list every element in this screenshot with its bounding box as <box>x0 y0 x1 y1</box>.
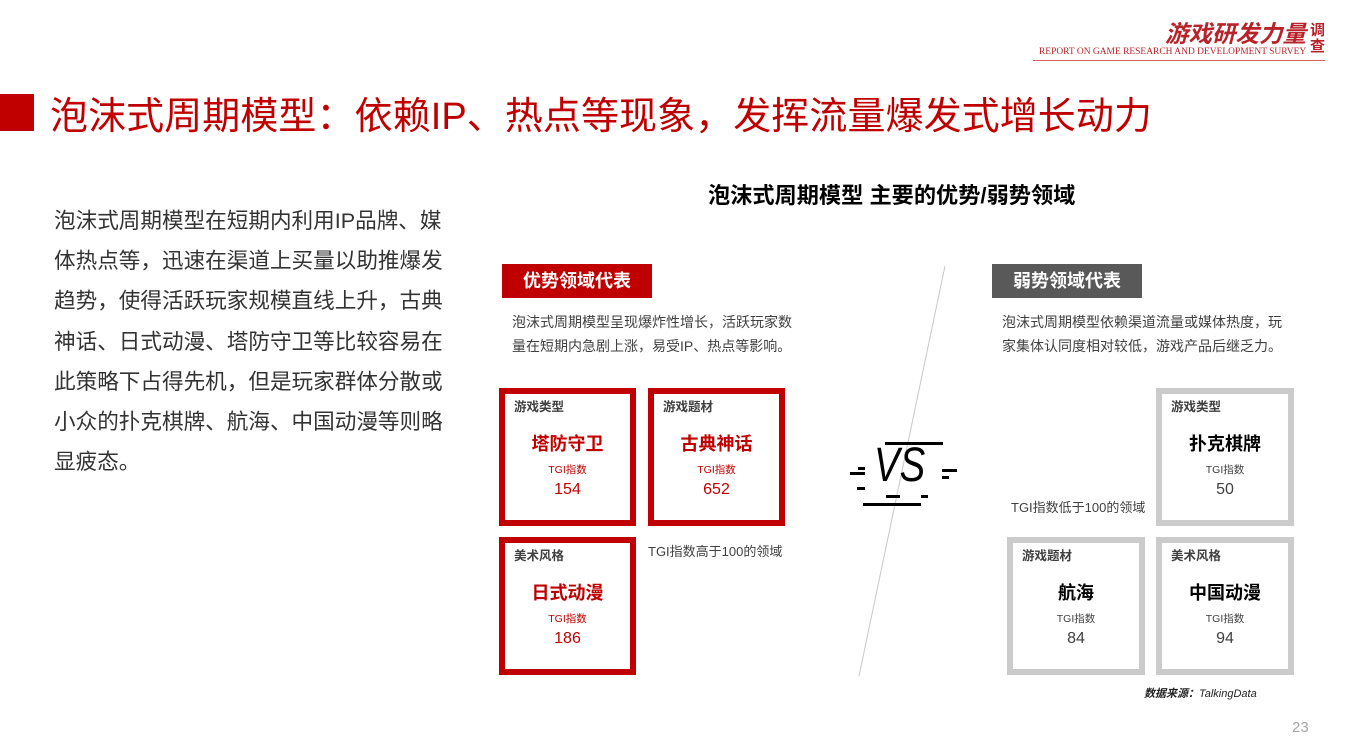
weakness description <box>1002 314 1282 354</box>
body text: 趋势，使得活跃玩家规模直线上升，古典 <box>54 288 443 313</box>
card: navigation: 84 <box>1067 630 1085 647</box>
VS text: VS <box>874 439 925 492</box>
logo title: 游戏研发力量 <box>1165 21 1306 47</box>
logo side text: 调查 <box>1310 22 1325 55</box>
weakness description: 泡沫式周期模型依赖渠道流量或媒体热度，玩 <box>1002 314 1282 330</box>
card: classical mythology: TGI指数 <box>697 464 736 476</box>
card: tower defense <box>499 388 636 526</box>
divider line <box>858 266 946 676</box>
body text <box>54 208 443 474</box>
card: japanese anime <box>499 537 636 675</box>
card: classical mythology <box>648 388 785 526</box>
body text: 显疲态。 <box>54 449 140 474</box>
VS graphic <box>850 439 957 506</box>
body text: 小众的扑克棋牌、航海、中国动漫等则略 <box>54 409 443 434</box>
advantage description: 泡沫式周期模型呈现爆炸性增长，活跃玩家数 <box>512 314 792 330</box>
weakness tag <box>992 264 1142 298</box>
card: chinese anime: TGI指数 <box>1206 613 1244 625</box>
title marker <box>0 94 34 131</box>
card: japanese anime: 日式动漫 <box>532 583 604 603</box>
weakness description: 家集体认同度相对较低，游戏产品后继乏力。 <box>1002 338 1282 354</box>
card: poker: 50 <box>1216 481 1234 498</box>
card: japanese anime: 186 <box>554 630 581 647</box>
card: japanese anime: 美术风格 <box>514 549 564 563</box>
card: tower defense: 塔防守卫 <box>532 434 604 454</box>
card: poker: 扑克棋牌 <box>1189 434 1261 454</box>
card: classical mythology: 652 <box>703 481 730 498</box>
advantage tag <box>502 264 652 298</box>
card: navigation: 游戏题材 <box>1022 549 1072 563</box>
logo subtitle: REPORT ON GAME RESEARCH AND DEVELOPMENT SURVEY <box>1039 47 1306 57</box>
body text: 神话、日式动漫、塔防守卫等比较容易在 <box>54 329 443 354</box>
card: japanese anime: TGI指数 <box>548 613 587 625</box>
card: poker <box>1156 388 1294 526</box>
body text: 此策略下占得先机，但是玩家群体分散或 <box>54 369 443 394</box>
card: chinese anime: 美术风格 <box>1171 549 1221 563</box>
card: chinese anime: 中国动漫 <box>1189 583 1261 603</box>
report logo <box>1033 21 1325 61</box>
card: classical mythology: 游戏题材 <box>663 400 713 414</box>
card: poker: TGI指数 <box>1206 464 1244 476</box>
card: chinese anime <box>1156 537 1294 675</box>
advantage tag: 优势领域代表 <box>523 271 631 291</box>
body text: 泡沫式周期模型在短期内利用IP品牌、媒 <box>54 208 442 233</box>
data source: 数据来源：TalkingData <box>1144 688 1257 700</box>
card: chinese anime: 94 <box>1216 630 1234 647</box>
body text: 体热点等，迅速在渠道上买量以助推爆发 <box>54 248 443 273</box>
card: classical mythology: 古典神话 <box>680 434 752 454</box>
note: above 100: TGI指数高于100的领域 <box>648 544 782 559</box>
card: navigation: TGI指数 <box>1057 613 1095 625</box>
logo underline <box>1033 60 1325 61</box>
chart heading: 泡沫式周期模型 主要的优势/弱势领域 <box>708 183 1075 208</box>
advantage description <box>512 314 792 354</box>
card: tower defense: 游戏类型 <box>514 400 564 414</box>
card: navigation <box>1007 537 1145 675</box>
advantage description: 量在短期内急剧上涨，易受IP、热点等影响。 <box>512 338 791 354</box>
card: navigation: 航海 <box>1058 583 1094 603</box>
weakness tag: 弱势领域代表 <box>1013 271 1121 291</box>
note: below 100: TGI指数低于100的领域 <box>1011 500 1145 515</box>
card: poker: 游戏类型 <box>1171 400 1221 414</box>
card: tower defense: 154 <box>554 481 581 498</box>
title: 泡沫式周期模型：依赖IP、热点等现象，发挥流量爆发式增长动力 <box>50 96 1152 138</box>
page number: 23 <box>1292 719 1309 736</box>
card: tower defense: TGI指数 <box>548 464 587 476</box>
